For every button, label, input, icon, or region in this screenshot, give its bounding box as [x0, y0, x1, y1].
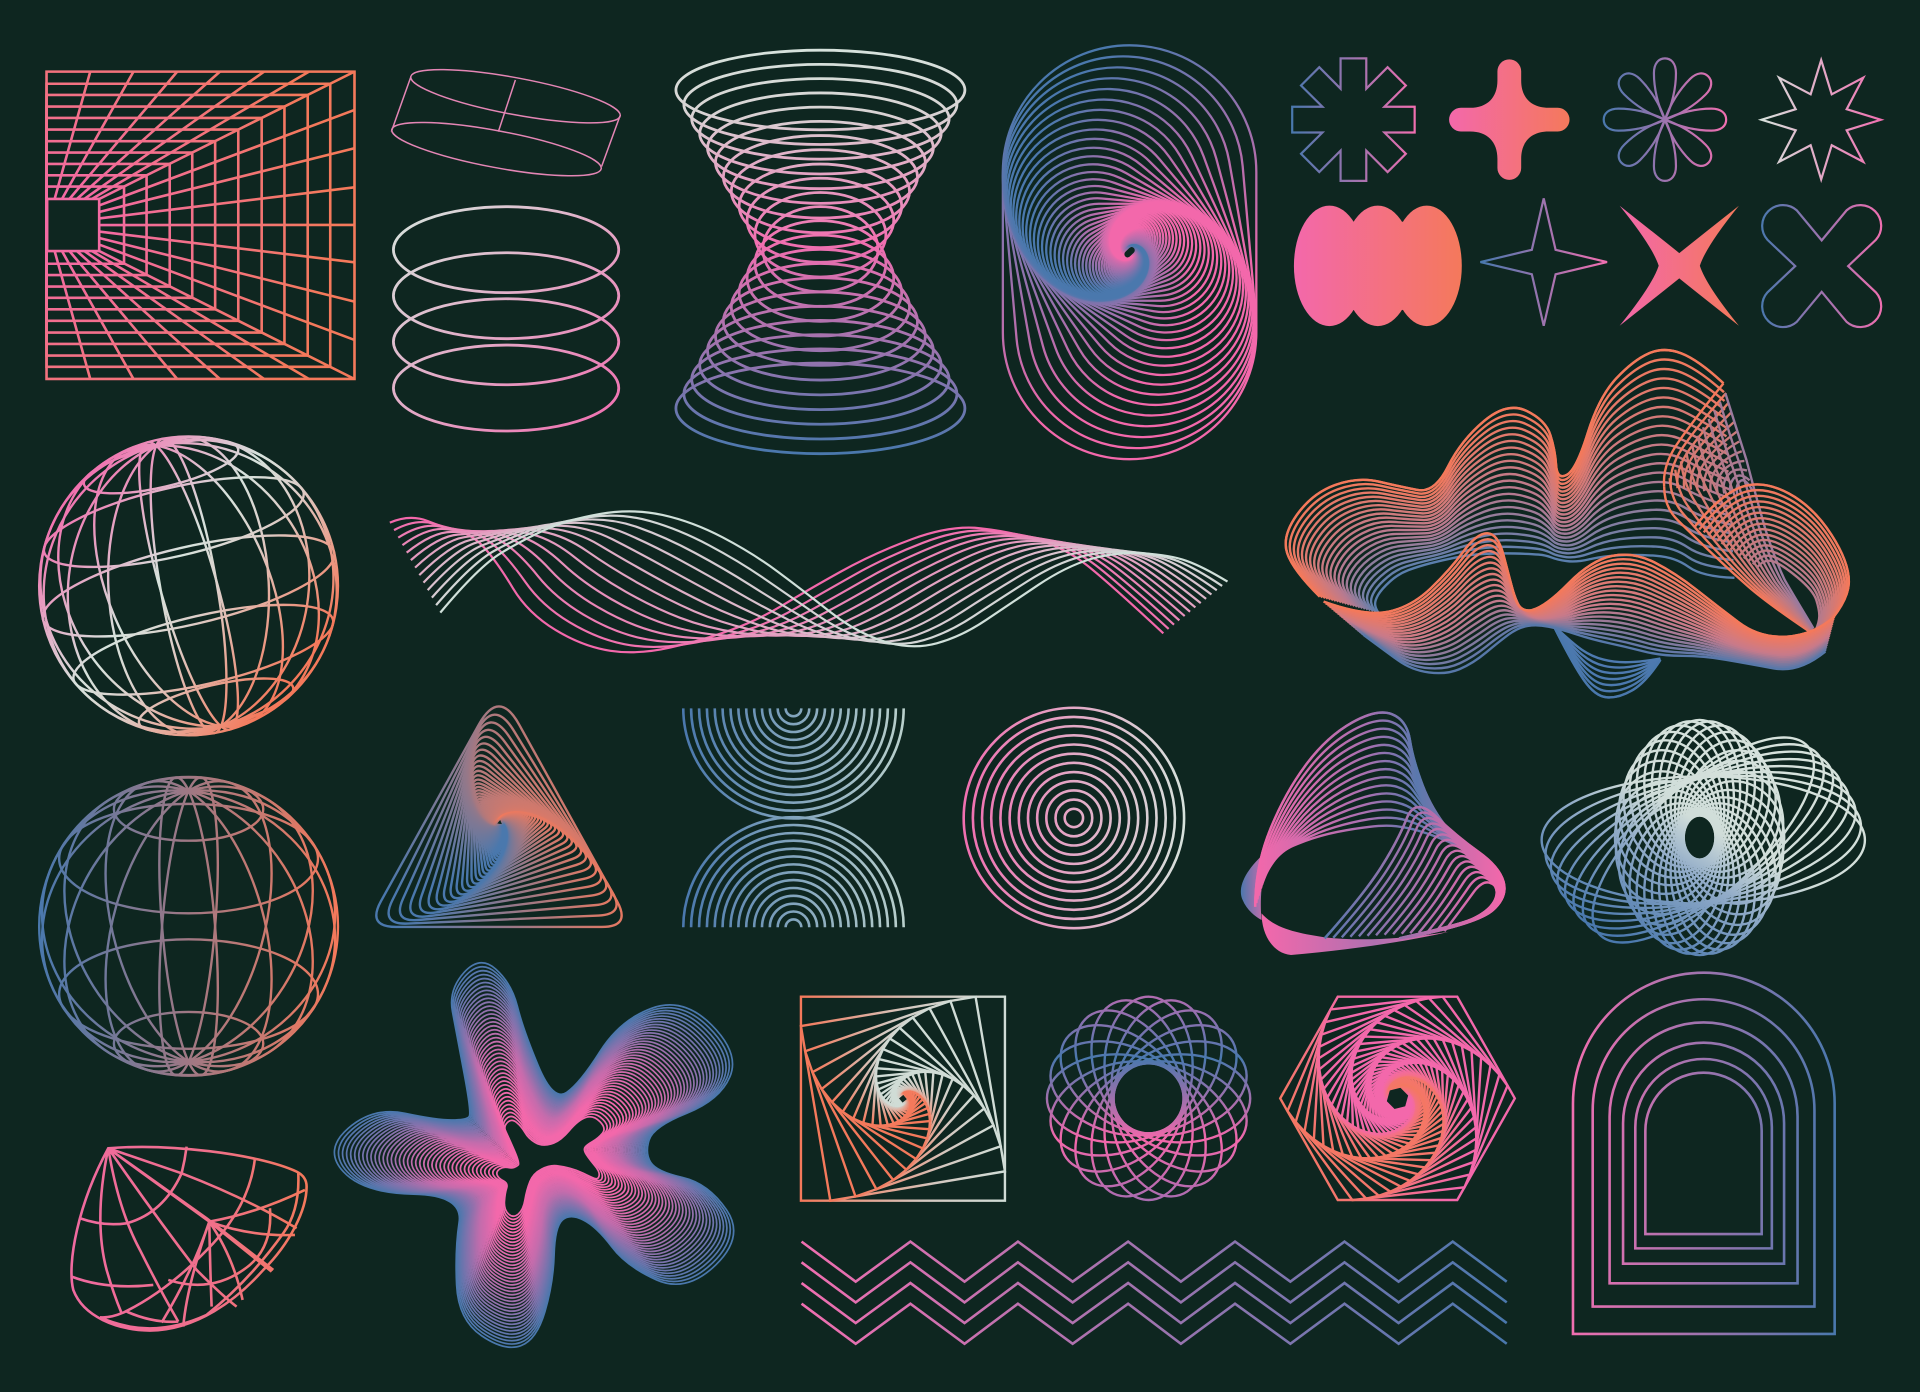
swirling nested pill: [956, 45, 1303, 459]
tilted cylinder band: [388, 59, 624, 187]
swirling rounded triangle: [376, 706, 622, 927]
icon: eight-point star outline: [1762, 60, 1881, 179]
icon: filled triple-oval blob: [1294, 206, 1462, 326]
icon: four-point star outline: [1480, 198, 1607, 326]
stacked zigzag lines: [802, 1242, 1507, 1344]
four stacked ellipses: [393, 207, 619, 431]
front-facing wireframe globe: [31, 769, 347, 1085]
wavy ribbon mountain: [1286, 350, 1849, 697]
twisted triangular ribbon: [1241, 713, 1504, 955]
icon: eight-petal flower outline: [1602, 57, 1728, 182]
five-armed flower blob: [334, 963, 734, 1347]
hourglass of concentric ellipses: [676, 50, 965, 454]
tilted wireframe globe: [31, 429, 347, 744]
wave line family: [390, 511, 1227, 652]
twisted nested square: [801, 997, 1005, 1201]
icon: eight-arm asterisk outline: [1292, 58, 1415, 181]
icon: filled rounded plus: [1449, 59, 1570, 180]
icon: filled sharp X: [1620, 206, 1739, 326]
half-sphere wireframe bowl: [71, 1147, 307, 1331]
concentric circles: [964, 708, 1184, 928]
nested arches: [1573, 973, 1835, 1334]
twisted nested hexagon: [1266, 970, 1529, 1227]
icon: rounded X outline: [1762, 205, 1881, 327]
perspective grid tunnel: [47, 72, 354, 379]
spirograph torus: [1540, 718, 1866, 956]
mirrored concentric semicircles: [683, 708, 904, 927]
spirograph ring: [1041, 989, 1256, 1207]
